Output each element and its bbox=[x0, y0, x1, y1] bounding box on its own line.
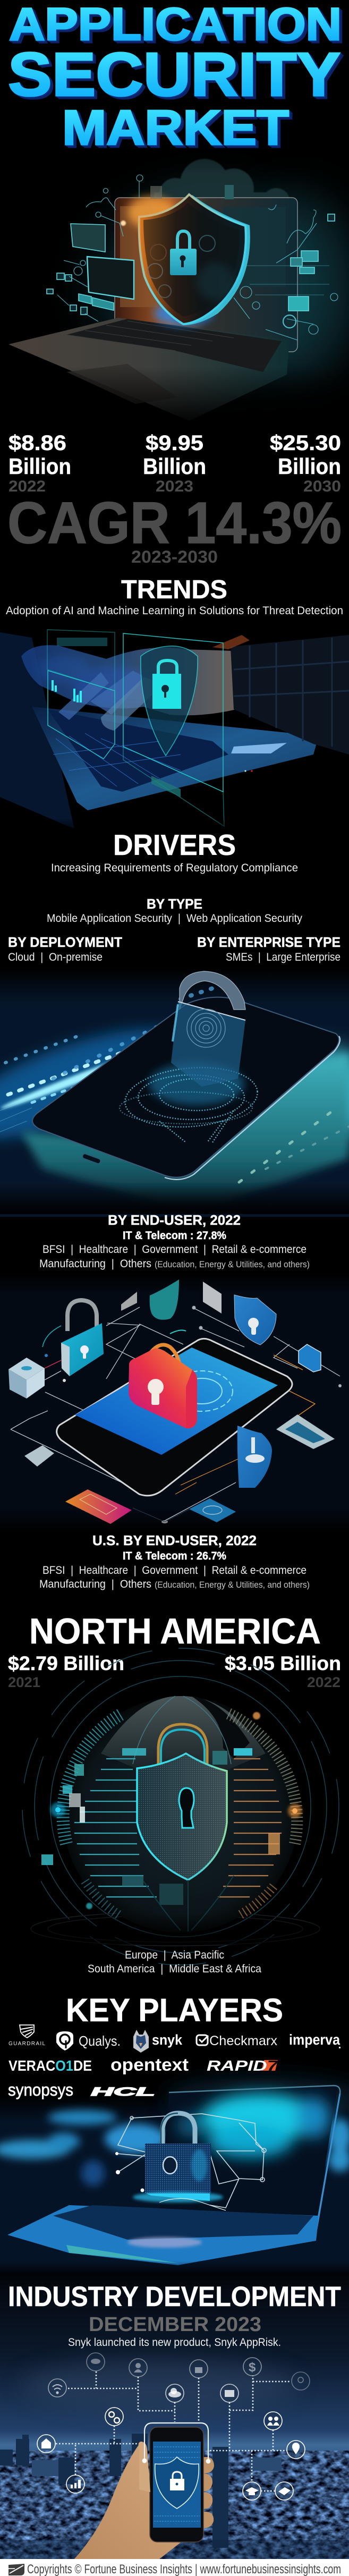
north america 2021: 2021 bbox=[8, 1674, 40, 1690]
teal shield bbox=[150, 1279, 179, 1320]
laptop bbox=[32, 707, 319, 810]
gray square bbox=[203, 1282, 222, 1314]
by end-user: Manufacturing | Others bbox=[39, 1258, 151, 1270]
screen bbox=[159, 2086, 338, 2221]
glowing network bbox=[117, 2114, 266, 2208]
background glow bbox=[0, 1007, 197, 1160]
blue shield bbox=[234, 1295, 276, 1345]
north america 2022: 2022 bbox=[307, 1674, 341, 1690]
logo: guardrail: GUARDRAIL bbox=[8, 2041, 45, 2047]
title: APPLICATION bbox=[9, 0, 342, 50]
padlock shackle bbox=[158, 1724, 207, 1769]
pink card bbox=[65, 1489, 132, 1524]
stat: 2023 bbox=[143, 431, 206, 495]
other regions: South America | Middle East & Africa bbox=[88, 1963, 261, 1975]
circuit fingerprint bbox=[149, 1063, 244, 1105]
by enterprise type bbox=[197, 934, 341, 963]
logo: rapid7: RAPID 7 bbox=[207, 2057, 279, 2074]
padlock bbox=[170, 231, 197, 275]
city and phone illustration bbox=[0, 2274, 349, 2559]
blurred lights bbox=[0, 2110, 349, 2186]
shield icon bbox=[141, 646, 198, 756]
U.S. by end-user: U.S. BY END-USER, 2022 bbox=[92, 1532, 257, 1548]
phone bbox=[57, 1338, 292, 1496]
U.S. by end-user bbox=[39, 1532, 310, 1590]
development text: Snyk launched its new product, Snyk AppRisk. bbox=[68, 2336, 281, 2349]
other regions: Europe | Asia Pacific bbox=[125, 1949, 224, 1961]
sleeve bbox=[231, 635, 349, 755]
by end-user: IT & Telecom : 27.8% bbox=[123, 1230, 226, 1242]
logo: snyk: snyk bbox=[152, 2032, 183, 2048]
by type: BY TYPE bbox=[147, 896, 202, 912]
trends heading: TRENDS bbox=[121, 575, 227, 604]
logo: imperva: imperva bbox=[289, 2031, 340, 2048]
title: MARKET bbox=[62, 100, 289, 155]
keyboard plate bbox=[276, 1414, 335, 1449]
bracket bbox=[142, 2423, 210, 2463]
teal padlock bbox=[61, 1300, 104, 1376]
north america 2021 bbox=[8, 1653, 124, 1690]
phone with padlock illustration bbox=[0, 967, 349, 1217]
stat: 2022 bbox=[8, 431, 71, 495]
north america 2022: $3.05 Billion bbox=[225, 1653, 341, 1674]
shield badge bbox=[299, 1344, 321, 1372]
holographic panels bbox=[47, 630, 224, 826]
by end-user: BY END-USER, 2022 bbox=[108, 1212, 241, 1228]
title bbox=[8, 0, 342, 155]
icon glyphs bbox=[41, 2359, 300, 2495]
mobile security illustration bbox=[0, 1273, 349, 1533]
logo: guardrail bbox=[8, 2025, 45, 2047]
other regions bbox=[88, 1949, 261, 1975]
by deployment: Cloud | On-premise bbox=[8, 951, 103, 963]
hand bbox=[74, 2444, 181, 2559]
stat: 2030: 2030 bbox=[303, 478, 341, 495]
phone bbox=[150, 2427, 203, 2542]
circuit rows bbox=[74, 1759, 157, 1897]
U.S. by end-user: Manufacturing | Others bbox=[39, 1578, 151, 1590]
stat: 2022: 2022 bbox=[8, 478, 46, 495]
small blue shield bbox=[237, 1426, 272, 1488]
logo: qualys: Qualys. bbox=[79, 2033, 121, 2049]
floating windows bbox=[47, 185, 335, 315]
stat: 2023: 2023 bbox=[156, 478, 193, 495]
trends illustration: hands on laptop bbox=[0, 619, 349, 834]
clouds bbox=[154, 159, 290, 216]
logo: qualys bbox=[56, 2031, 121, 2050]
drivers text: Increasing Requirements of Regulatory Compliance bbox=[51, 862, 298, 874]
by type bbox=[47, 896, 302, 925]
title: SECURITY bbox=[8, 40, 341, 109]
padlock bbox=[171, 971, 245, 1087]
key players heading: KEY PLAYERS bbox=[66, 1992, 283, 2028]
padlock bbox=[145, 2113, 211, 2201]
logo: synopsys: synopsys bbox=[8, 2080, 73, 2099]
logo: checkmarx: Checkmarx bbox=[209, 2033, 278, 2048]
footer logo bbox=[8, 2564, 24, 2575]
skyline bbox=[0, 2451, 349, 2559]
thumb bbox=[139, 2442, 150, 2492]
by end-user: (Education, Energy & Utilities, and others) bbox=[155, 1259, 310, 1269]
by deployment: BY DEPLOYMENT bbox=[8, 934, 122, 950]
icon glyphs: $ bbox=[249, 2360, 256, 2375]
logo: opentext: opentext bbox=[110, 2055, 189, 2074]
by end-user: BFSI | Healthcare | Government | Retail & e-commerce bbox=[42, 1243, 307, 1256]
laptop with lock illustration bbox=[0, 2078, 349, 2280]
dotted edge bbox=[63, 1714, 122, 1844]
laptop base bbox=[8, 318, 290, 421]
by type: Mobile Application Security | Web Application Security bbox=[47, 912, 302, 925]
stat: 2030: Billion bbox=[278, 454, 341, 479]
by enterprise type: BY ENTERPRISE TYPE bbox=[197, 934, 341, 950]
globe with padlock illustration bbox=[0, 1648, 349, 1965]
CAGR: 2023-2030 bbox=[131, 547, 218, 566]
logo: snyk bbox=[133, 2030, 183, 2053]
logo: veracode: VERACO1DE bbox=[8, 2057, 92, 2074]
blue card bbox=[189, 1498, 236, 1522]
trends text: Adoption of AI and Machine Learning in Solutions for Threat Detection bbox=[6, 605, 343, 617]
dotted connections bbox=[56, 2371, 291, 2491]
connector lines bbox=[11, 1307, 340, 1521]
laptop screen bbox=[115, 198, 297, 352]
orbit rings bbox=[22, 1648, 339, 1965]
circuit lines bbox=[57, 175, 338, 340]
by end-user bbox=[39, 1212, 310, 1270]
laptop base bbox=[7, 2205, 319, 2265]
by deployment bbox=[8, 934, 122, 963]
gray card bbox=[24, 1445, 54, 1467]
U.S. by end-user: (Education, Energy & Utilities, and others) bbox=[155, 1580, 310, 1590]
bright spots bbox=[55, 1807, 61, 1812]
padlock shield bbox=[137, 1753, 227, 1880]
globe bbox=[63, 1697, 299, 1933]
U.S. by end-user: BFSI | Healthcare | Government | Retail & e-commerce bbox=[42, 1564, 307, 1577]
stat: 2023: $9.95 bbox=[146, 431, 203, 455]
hero illustration: laptop and shield bbox=[0, 143, 349, 430]
phone bbox=[32, 997, 339, 1177]
glowing dots bbox=[0, 983, 349, 1182]
U.S. by end-user: IT & Telecom : 26.7% bbox=[123, 1550, 226, 1562]
drivers heading: DRIVERS bbox=[113, 828, 236, 861]
shield bbox=[139, 194, 250, 325]
cube bbox=[8, 1358, 45, 1399]
stat: 2022: Billion bbox=[8, 454, 71, 479]
north america 2021: $2.79 Billion bbox=[8, 1653, 124, 1674]
icon circles bbox=[37, 2353, 310, 2500]
stat: 2030: $25.30 bbox=[270, 431, 341, 455]
development date: DECEMBER 2023 bbox=[89, 2314, 261, 2336]
stat: 2030 bbox=[270, 431, 341, 495]
red padlock bbox=[129, 1345, 197, 1428]
gray plate bbox=[121, 1292, 137, 1311]
north america heading: NORTH AMERICA bbox=[29, 1611, 321, 1651]
hands bbox=[21, 645, 236, 715]
north america 2022 bbox=[225, 1653, 341, 1690]
stat: 2022: $8.86 bbox=[8, 431, 66, 455]
logo: hcl: HCL bbox=[91, 2085, 155, 2098]
stat: 2023: Billion bbox=[143, 454, 206, 479]
